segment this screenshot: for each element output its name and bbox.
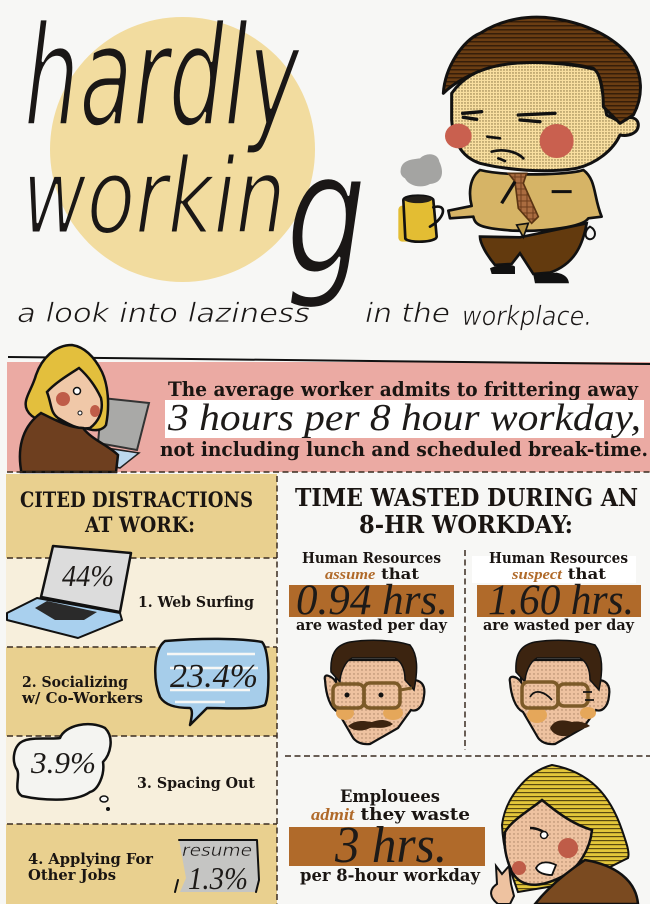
- stat: employees admit: admit they waste: [311, 805, 470, 824]
- item 4: resume 1.3% applying for other jobs: Other Jobs: [28, 866, 116, 884]
- item 4: resume 1.3% applying for other jobs: resume: [182, 841, 252, 861]
- callout: 3 hours: 3 hours per 8 hour workday,: [167, 397, 641, 439]
- title: g: [286, 116, 367, 314]
- stat: HR suspect: 1.60 hrs.: [488, 577, 634, 624]
- item 1: laptop 44% web surfing: 44%: [62, 558, 114, 593]
- subtitle: a look into laziness: [17, 298, 310, 329]
- stat: employees admit: Emplouees: [340, 787, 440, 806]
- item 3: thought cloud 3.9% spacing out: 3.9%: [30, 745, 96, 780]
- item 4: resume 1.3% applying for other jobs: 4. Applying For: [28, 850, 154, 868]
- icon: HR face suspect: [510, 640, 609, 744]
- item 1: laptop 44% web surfing: [7, 546, 254, 638]
- stat: HR suspect: suspect that: [511, 566, 606, 583]
- heading: cited distractions: AT WORK:: [84, 512, 195, 537]
- man body: [448, 170, 602, 283]
- item 3: thought cloud 3.9% spacing out: [14, 724, 255, 811]
- stat: HR assume: Human Resources: [302, 550, 441, 567]
- heading: time wasted: 8-HR WORKDAY:: [359, 510, 573, 539]
- stat: employees admit: per 8-hour workday: [300, 866, 480, 885]
- summary text: [160, 377, 648, 461]
- illustration: woman at laptop: [20, 345, 149, 472]
- top rule: [8, 357, 650, 364]
- icon: steam: [401, 154, 442, 186]
- heading: cited distractions: CITED DISTRACTIONS: [20, 487, 253, 512]
- panel: pink summary band: [7, 362, 650, 472]
- item 2: speech bubble 23.4% socializing: 2. Socializing: [22, 673, 128, 691]
- header: title circle: [50, 17, 315, 282]
- stat: employees admit: 3 hrs.: [334, 817, 447, 874]
- item 2: speech bubble 23.4% socializing: [21, 639, 268, 725]
- stat: HR suspect: Human Resources: [489, 550, 628, 567]
- item 1: laptop 44% web surfing: 1. Web Surfing: [138, 593, 254, 611]
- stat: HR assume: 0.94 hrs.: [296, 577, 448, 624]
- item 2: speech bubble 23.4% socializing: w/ Co-Workers: [21, 689, 143, 707]
- item 4: resume 1.3% applying for other jobs: 1.3%: [188, 860, 248, 896]
- heading: cited distractions: [20, 487, 253, 537]
- item 2: speech bubble 23.4% socializing: 23.4%: [170, 658, 258, 695]
- item 3: thought cloud 3.9% spacing out: 3. Spacing Out: [137, 774, 255, 792]
- stat: HR assume: assume that: [325, 566, 419, 583]
- subtitle: workplace.: [462, 301, 592, 332]
- subtitle: [17, 298, 592, 332]
- stat: HR assume: are wasted per day: [296, 617, 448, 634]
- stat: HR assume: [289, 550, 454, 634]
- stat: HR suspect: are wasted per day: [483, 617, 635, 634]
- stat: HR suspect: [472, 550, 641, 634]
- man head: [443, 17, 640, 171]
- icon: HR face assume: [325, 640, 424, 744]
- icon: coffee mug: [398, 196, 443, 242]
- illustration: man with coffee: [398, 17, 640, 283]
- panel: cited distractions column: [6, 474, 277, 904]
- title: workin: [22, 136, 372, 258]
- title: [22, 0, 367, 314]
- stat: employees admit: [289, 787, 485, 885]
- section dividers: [7, 472, 650, 904]
- heading: time wasted: [295, 483, 638, 539]
- title: hardly: [24, 0, 301, 159]
- item 4: resume 1.3% applying for other jobs: [28, 840, 259, 896]
- illustration: angry woman: [491, 765, 638, 904]
- subtitle: in the: [365, 298, 450, 329]
